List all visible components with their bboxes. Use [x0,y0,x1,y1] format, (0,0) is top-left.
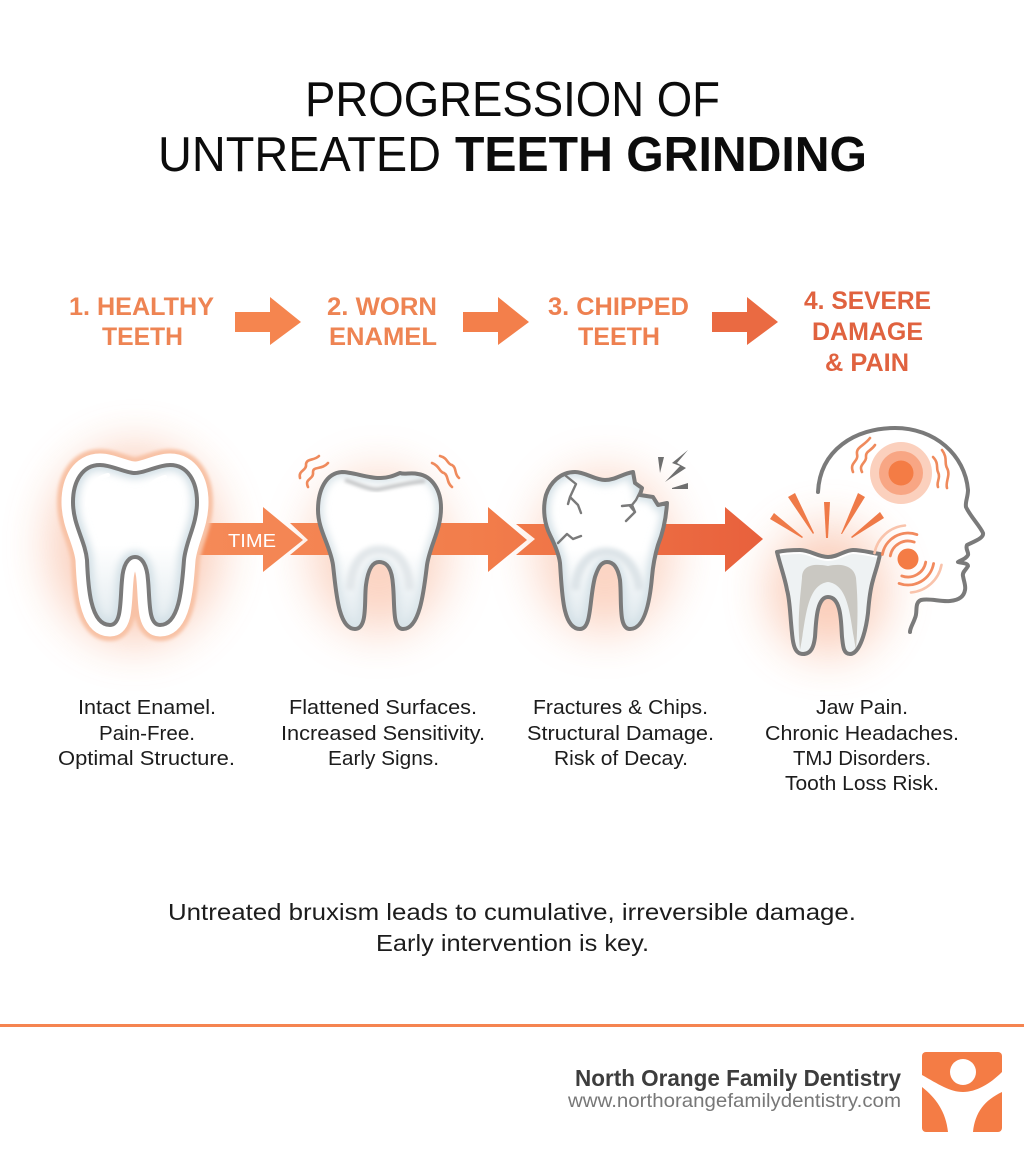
description columns [58,697,959,795]
cracks [558,476,642,543]
step 3 heading: TEETH [578,323,660,351]
column 4 text: Jaw Pain. [816,697,908,719]
conclusion text: Early intervention is key. [376,930,649,956]
column 1 text: Intact Enamel. [78,697,216,719]
step 2 heading: ENAMEL [329,323,437,351]
footer brand text: www.northorangefamilydentistry.com [567,1090,901,1112]
glows behind teeth [50,447,886,654]
column 2 text: Flattened Surfaces. [289,697,477,719]
step 2 heading [327,293,437,351]
column 4 text: TMJ Disorders. [793,748,931,770]
step 3 heading [548,293,689,351]
arrow 2 [463,297,529,345]
label: time: TIME [228,530,276,551]
footer brand text [567,1065,901,1112]
column 4 text: Chronic Headaches. [765,723,959,745]
step 1 heading [69,293,214,351]
tooth 3: chipped [544,450,688,629]
step 4 heading: 4. SEVERE [804,287,931,315]
step headings and arrows row [69,287,931,377]
footer logo [922,1052,1002,1132]
column 1 text [58,697,235,770]
column 2 text [281,697,485,770]
title: PROGRESSION OF [305,73,720,127]
pain rays [770,493,884,538]
headache target [870,442,932,504]
footer brand text: North Orange Family Dentistry [575,1065,901,1091]
column 3 text: Structural Damage. [527,723,714,745]
step 4 heading [804,287,931,377]
column 1 text: Optimal Structure. [58,748,235,770]
step 3 heading: 3. CHIPPED [548,293,689,321]
step 2 heading: 2. WORN [327,293,437,321]
impact bolt [658,450,688,489]
column 3 text [527,697,714,770]
headache waves [852,438,948,488]
conclusion text: Untreated bruxism leads to cumulative, irreversible damage. [168,899,856,925]
column 3 text: Fractures & Chips. [533,697,708,719]
title [158,73,867,182]
head profile with pain points [818,428,983,632]
tooth 2: worn enamel [300,456,459,629]
title: TEETH GRINDING [455,128,867,182]
jaw pain target [874,526,942,592]
footer divider [0,1024,1024,1027]
arrow 1 [235,297,301,345]
title: UNTREATED [158,128,441,182]
column 4 text: Tooth Loss Risk. [785,773,939,795]
column 3 text: Risk of Decay. [554,748,688,770]
column 1 text: Pain-Free. [99,723,195,745]
column 2 text: Early Signs. [328,748,439,770]
arrow 3 [712,297,778,345]
column 4 text [765,697,959,795]
time arrows [190,507,763,572]
tooth 4: severe damage [770,493,884,654]
conclusion text [168,899,856,956]
tooth 1: healthy [60,450,210,640]
step 1 heading: 1. HEALTHY [69,293,214,321]
step 4 heading: DAMAGE [812,318,923,346]
step 1 heading: TEETH [102,323,183,351]
column 2 text: Increased Sensitivity. [281,723,485,745]
step 4 heading: & PAIN [825,349,909,377]
vibration marks [300,456,459,487]
